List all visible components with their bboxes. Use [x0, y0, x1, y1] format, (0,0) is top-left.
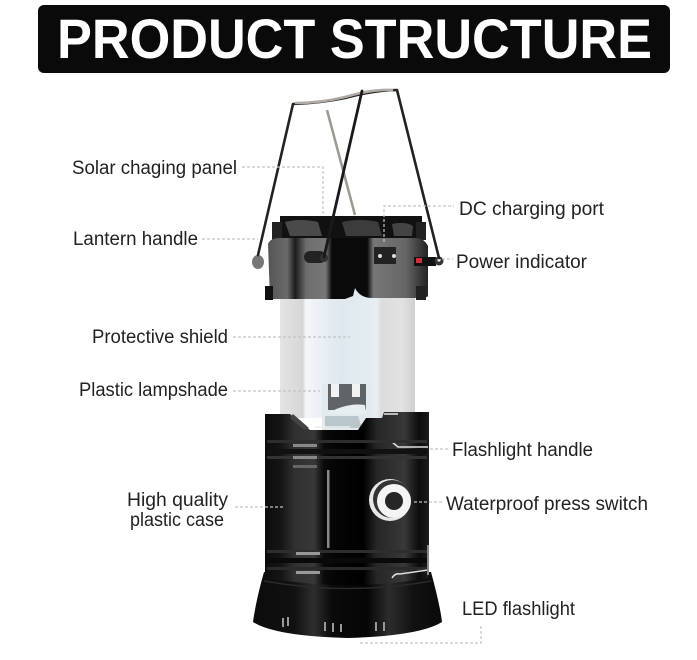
waterproof press switch	[369, 479, 411, 521]
front handle wires	[258, 90, 439, 258]
label: high quality plastic case: High quality	[127, 490, 229, 511]
lampshade	[280, 288, 415, 430]
leader lines	[202, 167, 481, 643]
label: flashlight handle: Flashlight handle	[452, 440, 593, 461]
LED flashlight base	[253, 572, 442, 638]
label: LED flashlight: LED flashlight	[462, 599, 576, 620]
lantern illustration	[252, 90, 444, 638]
label: high quality plastic case	[127, 490, 229, 531]
label: plastic lampshade: Plastic lampshade	[79, 380, 228, 401]
label: protective shield: Protective shield	[92, 327, 228, 348]
label: lantern handle: Lantern handle	[73, 229, 198, 250]
label: DC charging port: DC charging port	[459, 199, 605, 220]
label: solar charging panel: Solar chaging panel	[72, 158, 237, 179]
top cap	[252, 216, 444, 300]
label: waterproof press switch: Waterproof press switch	[446, 494, 648, 515]
label: high quality plastic case: plastic case	[130, 510, 224, 531]
title banner: PRODUCT STRUCTURE	[57, 7, 652, 70]
lower body	[265, 412, 429, 585]
label: power indicator: Power indicator	[456, 252, 588, 273]
back handle wire	[327, 110, 355, 215]
